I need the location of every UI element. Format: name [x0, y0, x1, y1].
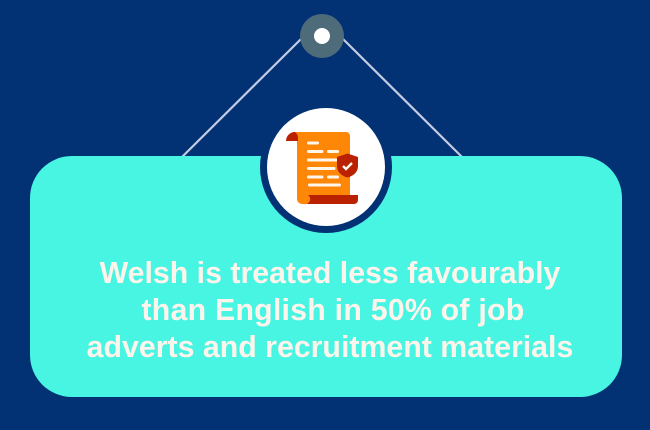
shield check: [343, 163, 352, 169]
text block: main statement: [87, 257, 573, 364]
icon badge circle: [260, 101, 392, 233]
icon: document scroll with shield: [260, 101, 392, 233]
scroll bottom: [304, 195, 358, 204]
hanging strings: [182, 38, 462, 157]
panel: sign board: [30, 156, 622, 397]
text block: main statement: adverts and recruitment materials: [87, 331, 573, 364]
scroll curl: [286, 132, 298, 141]
document text lines: [308, 143, 340, 185]
text block: main statement: Welsh is treated less favourably: [100, 257, 561, 290]
shield: [337, 154, 358, 178]
text block: main statement: than English in 50% of job: [141, 294, 525, 327]
icon: hanging pin: [300, 14, 344, 58]
scroll body: [293, 132, 350, 204]
